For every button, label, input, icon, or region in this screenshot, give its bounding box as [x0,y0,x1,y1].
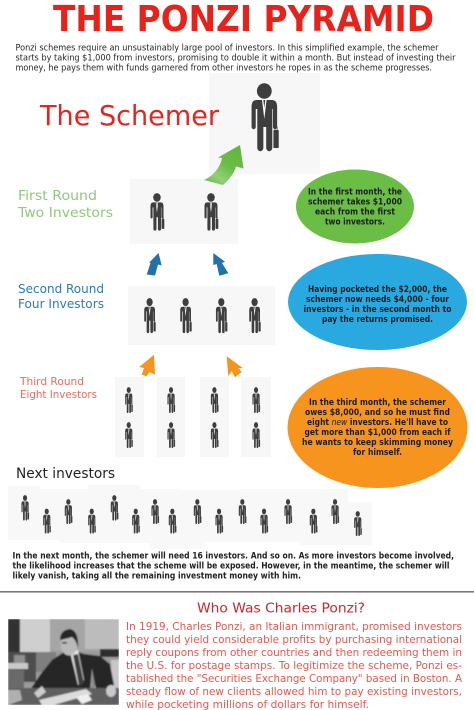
heading: The Schemer: The Schemer [39,99,219,132]
label: second round: Second Round [18,281,104,296]
heading: next investors: Next investors [16,466,115,482]
title: THE PONZI PYRAMID [53,0,434,40]
arrow: green to schemer [204,145,244,185]
body text: next month [12,552,454,582]
photo: charles ponzi [8,619,119,706]
callout: third month: owes $8,000, and so he must find [305,408,450,418]
label: third round: Third Round [19,376,84,388]
callout: second month: schemer now needs $4,000 - four [306,295,450,305]
callout: first month: each from the first [315,208,395,218]
intro text: starts by taking $1,000 from investors, promising to double it within a month. But instead of investing their [16,54,456,64]
body text: ponzi biography: steady flow of new clients allowed him to pay existing investors, [126,685,462,698]
arrows: orange [139,355,243,377]
callout: second month: investors - in the second month to [304,305,452,315]
body text: ponzi biography: reply coupons from other countries and then redeeming them in [126,646,462,659]
intro text: money, he pays them with funds garnered from other investors he ropes in as the scheme progresses. [16,64,432,74]
callout: third month: for himself. [353,448,402,458]
body text: ponzi biography: In 1919, Charles Ponzi, an Italian immigrant, promised investors [126,620,462,633]
callout: third month [288,367,468,488]
heading: who was charles ponzi: Who Was Charles Ponzi? [197,600,365,616]
panel: schemer [209,73,320,174]
body text: ponzi biography [126,620,463,710]
label: first round [17,188,113,221]
label: third round: Eight Investors [20,389,97,401]
callout: first month [296,170,414,244]
label: second round [18,281,104,311]
panel: third round investors [115,377,271,457]
icon: investor figures [21,495,362,536]
callout: second month: Having pocketed the $2,000, the [308,285,447,295]
label: first round: First Round [18,188,97,204]
panel: next investors [8,485,372,549]
label: second round: Four Investors [18,296,104,311]
icon: investor figures [144,298,261,333]
callout: third month: eight new investors. He'll have to [307,418,448,428]
arrows: blue [147,253,228,276]
callout: first month: two investors. [325,218,385,228]
callout: third month: he wants to keep skimming money [302,438,453,448]
callout: third month: get more than $1,000 from each if [304,428,451,438]
icon: investor figures [125,387,260,448]
panel: first round investors [130,179,238,244]
body text: next month: likely vanish, taking all the remaining investment money with him. [12,572,301,582]
callout: third month: In the third month, the schemer [309,398,447,408]
callout: second month [288,254,467,350]
intro text [16,44,456,74]
body text: ponzi biography: the U.S. for postage stamps. To legitimize the scheme, Ponzi es- [126,659,462,672]
body text: ponzi biography: they could yield considerable profits by purchasing international [126,633,462,646]
icon: schemer figure [252,83,279,151]
panel: second round investors [128,286,275,345]
label: first round: Two Investors [17,205,113,221]
body text: ponzi biography: tablished the "Securities Exchange Company" based in Boston. A [126,672,463,685]
callout: first month: schemer takes $1,000 [308,198,402,208]
callout: first month: In the first month, the [308,188,402,198]
icon: investor figures [150,193,218,231]
callout: second month: pay the returns promised. [322,315,433,325]
label: third round [19,376,97,401]
intro text: Ponzi schemes require an unsustainably large pool of investors. In this simplified example, the schemer [16,44,439,54]
